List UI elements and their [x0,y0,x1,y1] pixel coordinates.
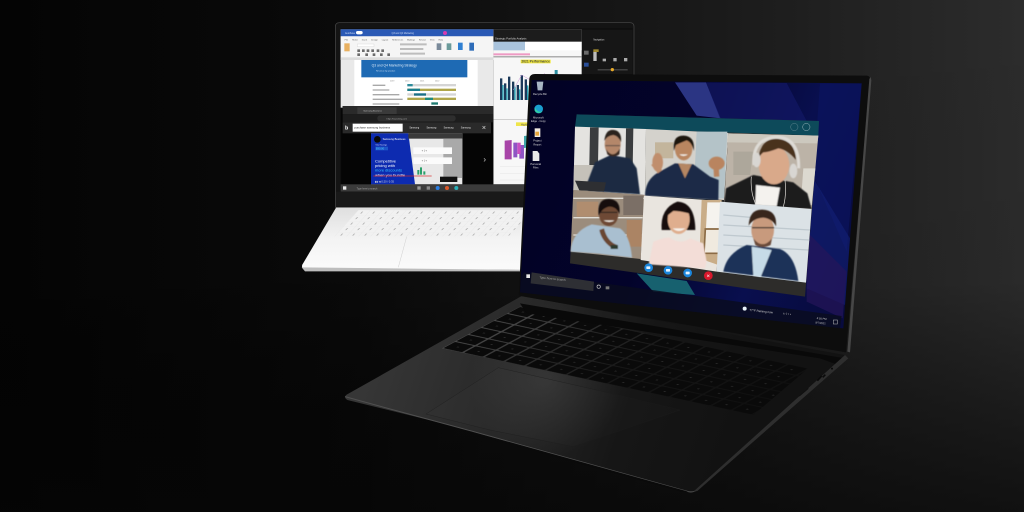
title bar: Q3 and Q4 Marketing [392,32,415,35]
video ad: more discounts [375,168,402,173]
video ad: Competitive [375,158,397,163]
front lid and screen [519,74,871,352]
infographic canvas [302,0,1024,512]
video call window [570,114,819,297]
presentation window: 2021 Performance [521,60,550,64]
ribbon: File Home Insert Design Layout References Mailings Review View Help [345,38,444,41]
dark design panel: Navigation [593,39,605,42]
laptop: black front laptop [345,74,871,492]
back taskbar: Type here to search [357,187,378,190]
front edge [345,397,697,492]
browser window: purchase samsung business [354,126,391,130]
title bar [341,29,493,36]
progress table [373,84,456,105]
dark design panel [582,29,633,74]
icon: recycle bin: Recycle Bin [533,92,548,96]
icon: browser [531,105,546,123]
lid [519,74,870,352]
window header [575,114,819,136]
video ad: when you bundle [375,172,406,177]
back laptop lid [335,23,634,207]
icon: project report: Project [533,139,542,143]
wallpaper [520,80,862,328]
icon: file: Personal [530,162,541,166]
icon: file: Files [533,166,539,170]
title bar: AutoSave [345,32,356,35]
video ad: $90.00 [376,147,385,151]
icon: project report [533,128,542,146]
word window [341,29,493,108]
back taskbar [341,184,574,192]
front taskbar: 9/7/2021 [815,320,826,325]
participant 5 [641,196,722,272]
video ad: ▮▮ ◀ 0:20 / 0:35 [375,179,395,183]
video ad: + | + [422,159,427,163]
back laptop bottom bezel [336,192,633,207]
side ports [693,355,848,492]
laptop: white back laptop [302,23,634,271]
browser window: › [483,155,486,164]
front taskbar: 4:55 PM [817,316,827,321]
video ad: Total Savings [375,143,387,146]
front taskbar: 77°F Raining now [749,308,774,315]
video ad: + | + [422,149,427,153]
document page: Revenue by product [376,70,396,73]
document page [354,60,478,108]
back screen [341,29,633,192]
browser window: b [345,125,349,131]
call controls [644,263,713,280]
browser window: https://www.bing.com [387,117,407,120]
video ad [371,133,462,184]
front lip [471,431,688,492]
icon: browser: Edge - Copy [531,119,546,123]
participant 2 [645,129,728,200]
video ad: Samsung Business [383,137,406,141]
front taskbar: ∧ ◊ ▪ ▪ [783,311,791,316]
document page: 2019 2020 2021 2022 [390,81,439,83]
desktop icons [530,82,548,170]
presentation window [493,29,582,184]
document page: Q3 and Q4 Marketing Strategy [372,64,417,68]
video ad: pricing with [375,163,395,168]
icon: file [530,151,541,170]
browser window: ✕ [482,125,486,131]
front taskbar: Type here to search [539,275,566,282]
participant 6 [717,202,812,283]
white keyboard base [302,207,532,271]
call controls: ✕ [706,273,710,278]
browser window: Samsung Business [363,111,382,113]
keyboard [442,303,850,419]
icon: browser: Microsoft [533,115,544,119]
browser window [343,106,493,184]
presentation window: Highlights [521,122,533,126]
bar chart [500,70,563,100]
3D bar chart [505,135,530,159]
presentation window: Strategic Portfolio Analysis [495,36,527,40]
ribbon [341,36,493,60]
front taskbar [520,272,842,328]
participant 3 [724,133,818,209]
participant 4 [571,190,645,259]
browser window: Samsung Samsung Samsung Samsung [409,127,471,129]
keyboard deck [345,296,850,492]
participant 1 [573,127,646,195]
icon: project report: Report [533,142,542,146]
trackpad [426,368,680,447]
